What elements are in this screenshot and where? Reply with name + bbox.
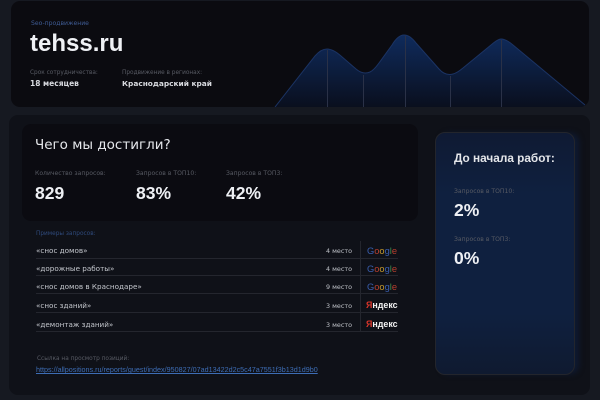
stat: top 3 <box>226 170 282 203</box>
achievements heading: Чего мы достигли? <box>35 137 171 153</box>
header subtitle: Seo-продвижение <box>31 20 89 27</box>
panel: header <box>11 1 589 107</box>
stat: top 10 <box>136 170 196 203</box>
logo: google 3: Google <box>367 282 397 292</box>
stat label: Запросов в ТОП3: <box>454 236 510 243</box>
stat label: Запросов в ТОП3: <box>226 170 282 177</box>
stat label: Запросов в ТОП10: <box>136 170 196 177</box>
stat value: 0% <box>454 248 479 268</box>
area chart <box>274 34 586 107</box>
stat value: 83% <box>136 183 171 203</box>
label: region: Продвижение в регионах: <box>122 70 202 76</box>
panel: achievements <box>22 124 418 221</box>
site title: tehss.ru <box>30 30 123 57</box>
position 3: 9 место <box>326 283 352 291</box>
query 2: «дорожные работы» <box>36 264 114 273</box>
panel: main <box>9 115 590 395</box>
stat: before top 10 <box>454 188 514 220</box>
value: cooperation term: 18 месяцев <box>30 79 79 88</box>
before heading: До начала работ: <box>454 151 555 165</box>
position 4: 3 место <box>326 302 352 310</box>
link label: Ссылка на просмотр позиций: <box>37 356 129 362</box>
position 5: 3 место <box>326 321 352 329</box>
stat label: Количество запросов: <box>35 170 106 177</box>
stat value: 2% <box>454 200 479 220</box>
logo: google 2: Google <box>367 264 397 274</box>
stat: before top 3 <box>454 236 510 268</box>
label: cooperation term: Срок сотрудничества: <box>30 70 98 76</box>
query 4: «снос зданий» <box>36 301 91 310</box>
stat value: 829 <box>35 183 64 203</box>
query 3: «снос домов в Краснодаре» <box>36 282 142 291</box>
position 2: 4 место <box>326 265 352 273</box>
panel: before work <box>435 132 575 375</box>
query 1: «снос домов» <box>36 246 88 255</box>
logo: yandex 1: Яндекс <box>366 300 398 310</box>
link: https://allpositions.ru/reports/guest/index/950827/07ad13422d2c5c47a7551f3b13d1d9b0 <box>36 365 318 374</box>
value: region: Краснодарский край <box>122 79 212 88</box>
position 1: 4 место <box>326 247 352 255</box>
table heading: Примеры запросов: <box>36 231 96 237</box>
stat label: Запросов в ТОП10: <box>454 188 514 195</box>
stat value: 42% <box>226 183 261 203</box>
logo: yandex 2: Яндекс <box>366 319 398 329</box>
query 5: «демонтаж зданий» <box>36 320 113 329</box>
logo: google 1: Google <box>367 246 397 256</box>
stat: queries <box>35 170 106 203</box>
